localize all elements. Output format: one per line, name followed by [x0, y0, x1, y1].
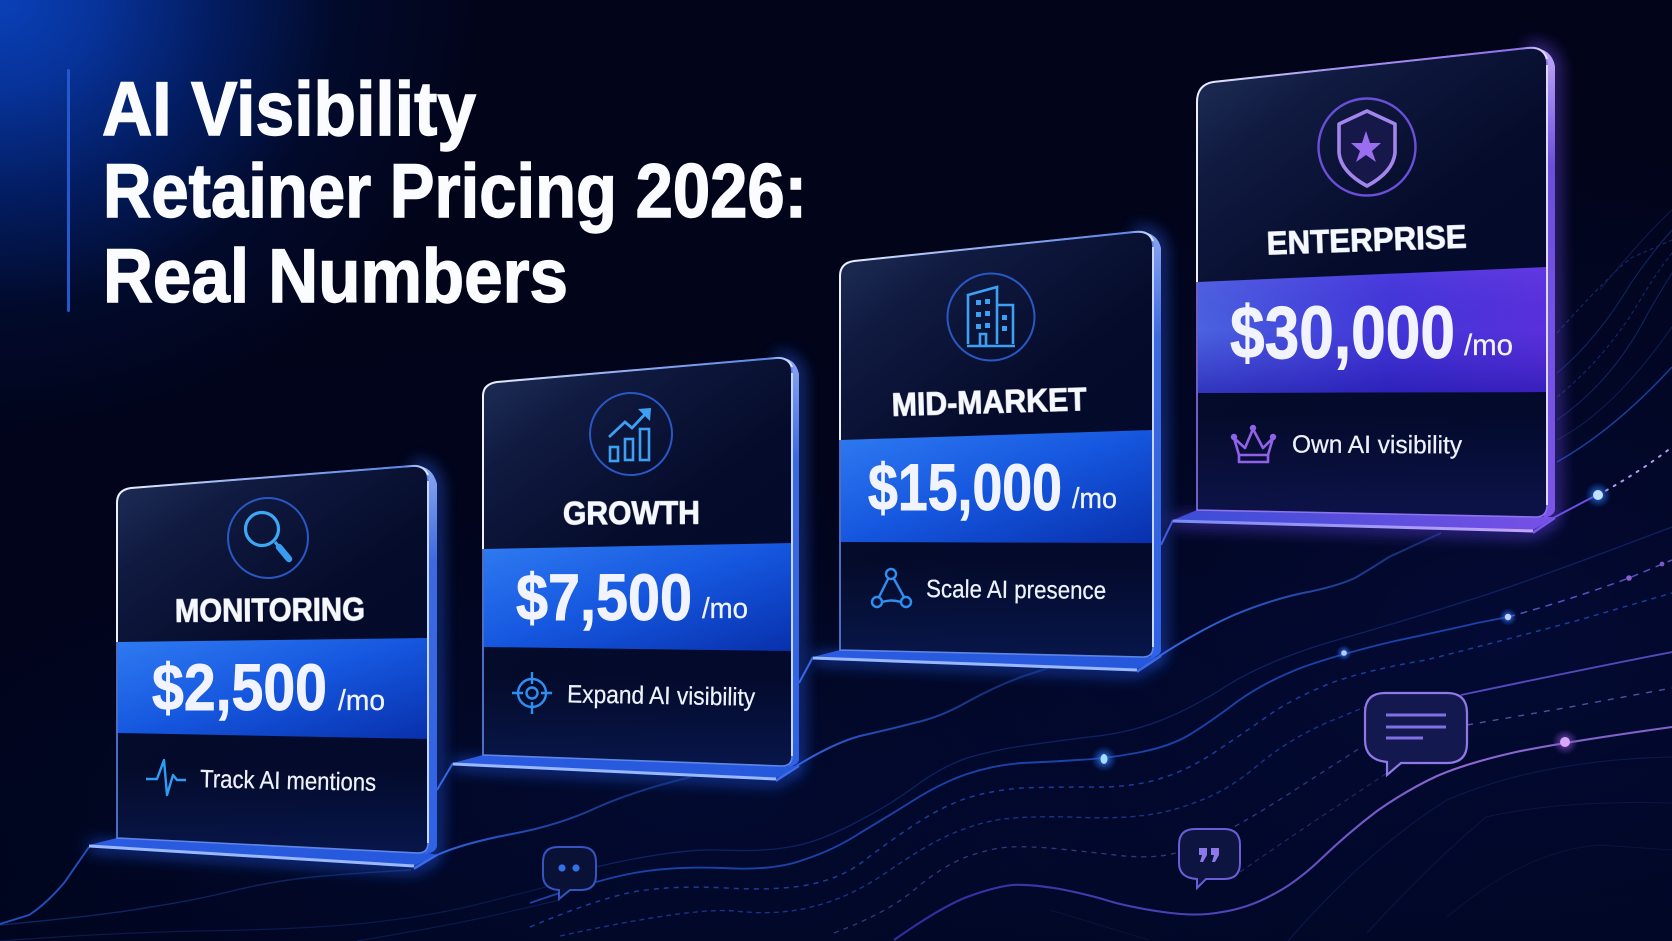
panel edges: [483, 358, 792, 766]
title text: AI Visibility: [102, 67, 476, 152]
icon: pulse: [146, 760, 186, 795]
icon: building: [948, 274, 1034, 360]
price band: [1198, 267, 1547, 393]
title accent bar: [67, 69, 70, 312]
tier name: MONITORING: [175, 591, 365, 629]
price: $15,000: [868, 450, 1062, 524]
icon: growth chart: [590, 393, 672, 475]
panel edges: [117, 466, 428, 853]
icon: speech bubble with lines: [1365, 693, 1467, 775]
price band: [841, 430, 1153, 543]
benefit text: Expand AI visibility: [567, 680, 756, 712]
price: /mo: [338, 685, 385, 717]
price: /mo: [1464, 329, 1513, 362]
title text: Real Numbers: [103, 234, 568, 319]
tier name: ENTERPRISE: [1266, 219, 1467, 261]
icon: speech bubble with quote: [1179, 829, 1240, 888]
panel: growth tier: [453, 358, 800, 781]
benefit text: Track AI mentions: [200, 765, 376, 797]
price band: [118, 638, 428, 739]
panel: mid-market tier: [813, 232, 1161, 672]
tier name: MID-MARKET: [891, 381, 1088, 423]
price: $7,500: [516, 560, 692, 634]
panel: monitoring tier: [89, 466, 437, 868]
panel edges: [840, 232, 1153, 657]
title: [67, 67, 807, 319]
price band: [484, 543, 792, 651]
title text: Retainer Pricing 2026:: [103, 149, 807, 234]
benefit text: Own AI visibility: [1292, 431, 1463, 459]
title text: [102, 67, 807, 319]
price: /mo: [1072, 483, 1117, 515]
icon: crown: [1231, 425, 1276, 462]
tier name: GROWTH: [563, 495, 700, 531]
panel: enterprise tier: [1173, 48, 1555, 533]
icon: magnifier: [228, 498, 308, 578]
price: /mo: [702, 593, 748, 625]
icon: shield star: [1318, 98, 1416, 196]
flowing network lines: [0, 210, 1672, 941]
price: $2,500: [152, 650, 327, 724]
benefit text: Scale AI presence: [926, 575, 1106, 605]
icon: speech bubble with dots: [543, 847, 596, 899]
icon: network triangle: [872, 569, 911, 607]
price: $30,000: [1230, 291, 1455, 374]
icon: target: [512, 672, 552, 714]
glowing nodes: [1091, 482, 1664, 772]
panel edges: [1197, 48, 1547, 517]
